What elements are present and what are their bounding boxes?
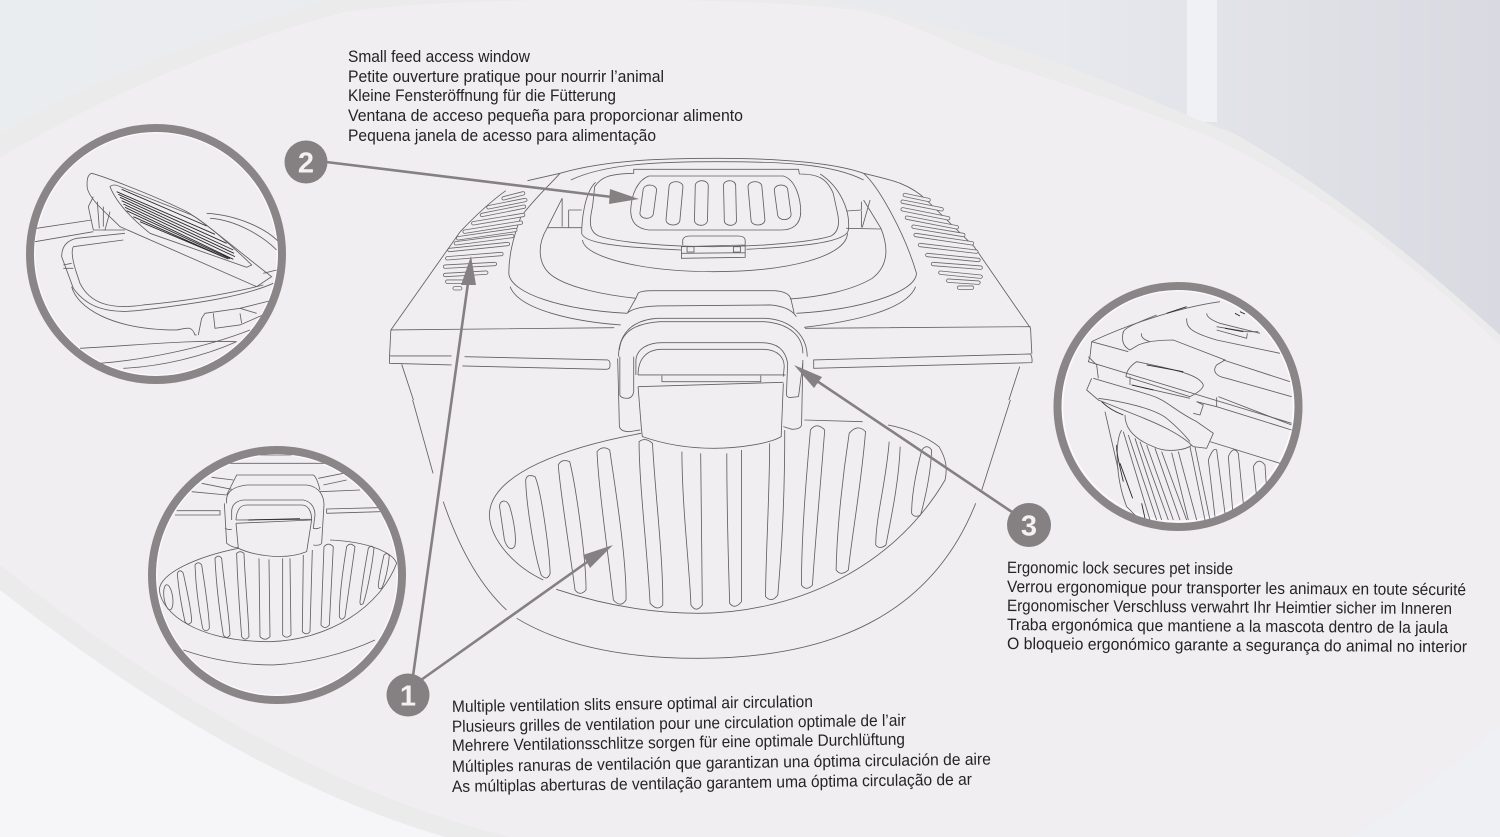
arrow: badge 1 to lid slats xyxy=(413,256,476,676)
text block: ergonomic lock: Verrou ergonomique pour transporter les animaux en toute sécurité xyxy=(1007,578,1466,599)
arrow: badge 2 to feed window xyxy=(326,162,639,204)
text block: feed window: Kleine Fensteröffnung für die Fütterung xyxy=(348,87,616,105)
text block: ergonomic lock: Ergonomic lock secures pet inside xyxy=(1007,559,1233,578)
text block: ventilation slits: As múltiplas aberturas de ventilação garantem uma óptima circulação de ar xyxy=(452,771,972,796)
inset line art: base vents xyxy=(159,455,397,665)
text block: feed window: Small feed access window xyxy=(348,48,530,66)
text block: ergonomic lock xyxy=(1007,559,1468,656)
arrow: badge 1 to base vents xyxy=(421,545,613,680)
badge 3 xyxy=(1007,503,1051,547)
inset line art: flap slats xyxy=(117,189,235,259)
text block: feed window: Petite ouverture pratique pour nourrir l’animal xyxy=(348,68,664,86)
text block: ergonomic lock: Ergonomischer Verschluss verwahrt Ihr Heimtier sicher im Inneren xyxy=(1007,597,1452,618)
badge 1 xyxy=(386,674,430,716)
text block: ergonomic lock: O bloqueio ergonómico garante a segurança do animal no interior xyxy=(1007,635,1468,656)
carrier lid and latch xyxy=(390,158,1032,448)
inset line art: lock side view xyxy=(1087,302,1292,520)
text block: ventilation slits: Multiple ventilation slits ensure optimal air circulation xyxy=(452,693,813,716)
badge 2: 2 xyxy=(298,148,314,180)
text block: ventilation slits: Mehrere Ventilationsschlitze sorgen für eine optimale Durchlüftung xyxy=(452,731,905,755)
text block: feed window: Pequena janela de acesso para alimentação xyxy=(348,127,656,145)
badge 2 xyxy=(284,140,328,184)
inset: ergonomic lock xyxy=(1058,286,1298,527)
text block: feed window xyxy=(348,48,743,145)
text block: ergonomic lock: Traba ergonómica que mantiene a la mascota dentro de la jaula xyxy=(1007,616,1449,637)
inset line art: feed window flap xyxy=(35,173,280,368)
main carrier drawing xyxy=(390,158,1032,658)
carrier body and vented base xyxy=(413,400,1010,658)
inset: open feed window xyxy=(30,128,282,380)
text block: ventilation slits: Plusieurs grilles de ventilation pour une circulation optimale de l’air xyxy=(452,712,906,736)
text block: ventilation slits xyxy=(452,693,991,796)
text block: feed window: Ventana de acceso pequeña para proporcionar alimento xyxy=(348,107,743,125)
lid ventilation slats xyxy=(445,193,981,288)
inset line art: latch bar xyxy=(248,519,300,520)
arrow: badge 3 to lock xyxy=(794,365,1012,512)
text block: ventilation slits: Múltiples ranuras de ventilación que garantizan una óptima circulación de aire xyxy=(452,750,991,776)
badge 3: 3 xyxy=(1021,510,1037,542)
badge 1: 1 xyxy=(400,680,416,712)
inset: base vents and latch xyxy=(152,450,402,700)
inset line art: dark slots xyxy=(1102,307,1245,518)
